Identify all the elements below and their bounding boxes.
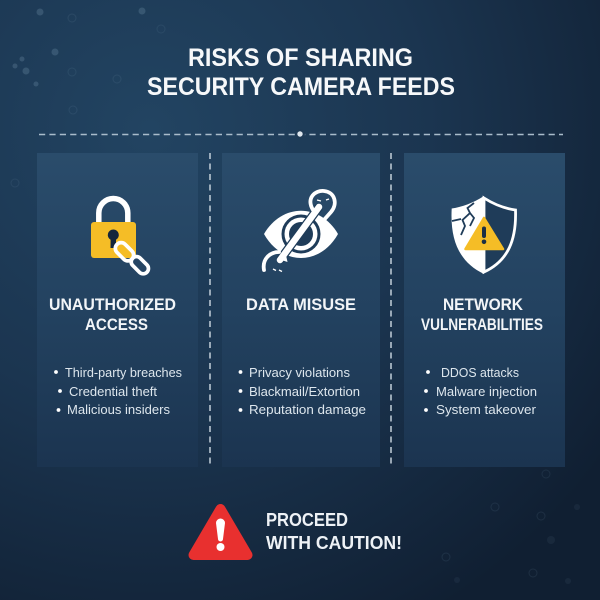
title xyxy=(147,44,455,101)
risk list: Malware injection xyxy=(436,384,537,399)
panel: data misuse xyxy=(222,153,380,467)
heading xyxy=(49,296,176,334)
risk list xyxy=(424,365,537,417)
risk list xyxy=(239,365,366,417)
caution text xyxy=(266,510,402,553)
heading xyxy=(421,296,543,334)
title: SECURITY CAMERA FEEDS xyxy=(147,73,455,101)
icon: eye with chain xyxy=(264,191,338,272)
icon: warning triangle xyxy=(194,509,248,555)
risk list: Credential theft xyxy=(69,384,157,399)
icon: cracked shield with warning xyxy=(452,196,516,274)
risk list: Reputation damage xyxy=(249,402,366,417)
risk list: Blackmail/Extortion xyxy=(249,384,360,399)
caution text: WITH CAUTION! xyxy=(266,533,402,553)
title: RISKS OF SHARING xyxy=(188,44,413,72)
risk list: DDOS attacks xyxy=(441,365,519,380)
icon: padlock with chain xyxy=(91,198,151,276)
panel: unauthorized access xyxy=(37,153,198,467)
risk list xyxy=(54,365,182,417)
caution text: PROCEED xyxy=(266,510,348,530)
heading: VULNERABILITIES xyxy=(421,316,543,334)
heading: UNAUTHORIZED xyxy=(49,296,176,314)
heading: ACCESS xyxy=(85,316,148,334)
risk list: System takeover xyxy=(436,402,537,417)
risk list: Malicious insiders xyxy=(67,402,170,417)
panel: network vulnerabilities xyxy=(404,153,565,467)
heading: NETWORK xyxy=(443,296,523,314)
callout: proceed with caution xyxy=(194,509,402,555)
risk list: Privacy violations xyxy=(249,365,350,380)
risk list: Third-party breaches xyxy=(65,365,182,380)
heading: DATA MISUSE xyxy=(246,296,356,314)
